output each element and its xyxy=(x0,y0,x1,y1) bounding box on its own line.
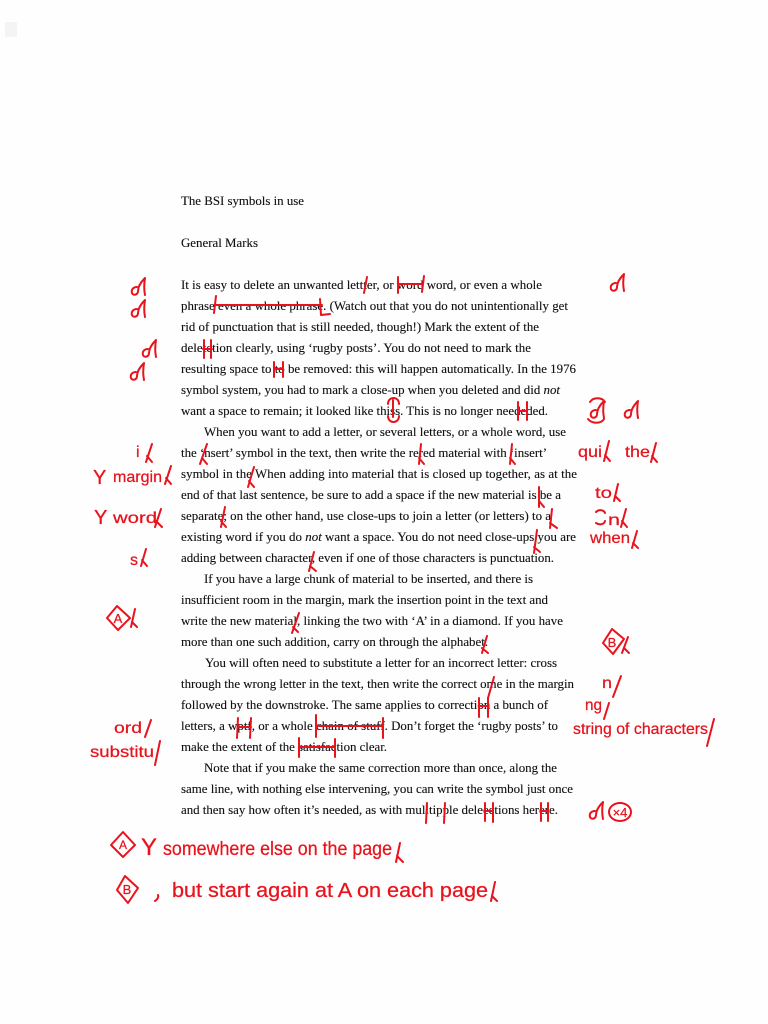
right margin substitutions: string of characters xyxy=(573,721,708,738)
right margin insertions: n xyxy=(608,512,620,529)
right margin insertions: qui xyxy=(578,444,602,461)
right margin substitutions: n xyxy=(602,675,612,692)
icon: times four, circled xyxy=(609,803,631,821)
paragraph: repeated corrections xyxy=(181,761,573,817)
right margin insertions: the xyxy=(625,444,650,461)
right margin insertions xyxy=(578,441,657,548)
footnote A xyxy=(111,832,403,862)
paragraph: deleting: rid of punctuation that is still needed, though!) Mark the extent of the xyxy=(181,320,539,334)
paragraph: inserting: When you want to add a letter, or several letters, or a whole word, use xyxy=(204,425,566,439)
icon: times four, circled: ×4 xyxy=(613,805,627,820)
paragraph: deleting: It is easy to delete an unwanted lettter, or word word, or even a whole xyxy=(181,278,542,292)
title: The BSI symbols in use xyxy=(181,194,304,208)
left margin insertions: word xyxy=(112,510,157,527)
icon: diamond A, left margin: A xyxy=(114,611,123,626)
icon: delete marks in left margin xyxy=(131,278,156,380)
left margin insertions: Y xyxy=(94,507,107,529)
paragraph: deleting: deletetion clearly, using ‘rugby posts’. You do not need to mark the xyxy=(181,341,531,355)
paragraph: substituting: You will often need to substitute a letter for an incorrect letter: cross xyxy=(205,656,557,670)
paragraph: substituting: letters, a wptf, or a whole chain of stuff. Don’t forget the ‘rugby posts’ to xyxy=(181,719,558,733)
paragraph: inserting: existing word if you do not want a space. You do not need close-ups you are xyxy=(181,530,576,544)
footnote A: somewhere else on the page xyxy=(163,839,392,860)
scan smudge xyxy=(5,22,17,37)
paragraph: deleting: symbol system, you had to mark a close-up when you deleted and did not xyxy=(181,383,560,397)
footnote B xyxy=(117,876,497,903)
paragraph: deleting: resulting space to to be removed: this will happen automatically. In the 1976 xyxy=(181,362,577,376)
in-text substitution marks xyxy=(237,677,548,823)
paragraph: large insertions xyxy=(181,572,563,649)
paragraph: large insertions: If you have a large chunk of material to be inserted, and there is xyxy=(204,572,533,586)
icon: delete marks in right margin xyxy=(588,274,638,819)
in-text insertion marks xyxy=(200,444,557,653)
footnote B: B xyxy=(123,882,131,897)
left margin substitutions xyxy=(90,720,160,765)
paragraph: inserting xyxy=(181,425,577,565)
in-text deletion marks xyxy=(203,276,527,422)
left margin insertions: s xyxy=(130,552,138,569)
paragraph: substituting xyxy=(181,656,575,754)
paragraph: repeated corrections: and then say how often it’s needed, as with mulltipple deleeetions herere. xyxy=(181,803,558,817)
heading: General Marks: General Marks xyxy=(181,236,258,250)
paragraph: large insertions: insufficient room in the margin, mark the insertion point in the text and xyxy=(181,593,549,607)
paragraph: substituting: make the extent of the satisfaction clear. xyxy=(181,740,387,754)
paragraph: inserting: end of that last sentence, be sure to add a space if the new material is be a xyxy=(181,488,561,502)
right margin insertions: to xyxy=(595,485,612,502)
right margin insertions: when xyxy=(589,530,630,547)
footnote A: A xyxy=(119,838,127,852)
left margin substitutions: substitu xyxy=(90,744,154,761)
paragraph: deleting xyxy=(181,278,577,418)
paragraph: large insertions: write the new material, linking the two with ‘A’ in a diamond. If you have xyxy=(181,614,563,628)
paragraph: inserting: symbol in the When adding into material that is closed up together, as at the xyxy=(181,467,577,481)
icon: diamond B, right margin: B xyxy=(608,635,616,650)
paragraph: large insertions: more than one such addition, carry on through the alphabet. xyxy=(181,635,488,649)
icon: diamond B, right margin xyxy=(603,629,629,654)
paragraph: repeated corrections: same line, with nothing else intervening, you can write the symbol just once xyxy=(181,782,573,796)
paragraph: inserting: the ‘nsert’ symbol in the text, then write the rered material with ‘insert’ xyxy=(181,446,547,460)
paragraph: inserting: adding between character, even if one of those characters is punctuation. xyxy=(181,551,554,565)
paragraph: inserting: separate; on the other hand, use close-ups to join a letter (or letters) to a xyxy=(181,509,551,523)
paragraph: deleting: want a space to remain; it looked like thiss. This is no longer neededed. xyxy=(181,404,548,418)
icon: diamond A, left margin xyxy=(107,606,137,630)
paragraph: deleting: phrase even a whole phrase. (Watch out that you do not unintentionally get xyxy=(181,299,568,313)
left margin substitutions: ord xyxy=(114,720,142,737)
right margin substitutions xyxy=(573,675,714,746)
paragraph: substituting: through the wrong letter in the text, then write the correct ome in the margin xyxy=(181,677,575,691)
left margin insertions: i xyxy=(136,444,140,461)
left margin insertions: margin xyxy=(113,469,162,486)
footnote A: Y xyxy=(141,834,157,861)
footnote B: but start again at A on each page xyxy=(172,880,488,902)
left margin insertions: Y xyxy=(93,467,106,489)
left margin insertions xyxy=(93,444,171,569)
right margin substitutions: ng xyxy=(585,697,602,714)
paragraph: repeated corrections: Note that if you make the same correction more than once, along the xyxy=(204,761,557,775)
paragraph: substituting: followed by the downstroke. The same applies to correction a bunch of xyxy=(181,698,549,712)
